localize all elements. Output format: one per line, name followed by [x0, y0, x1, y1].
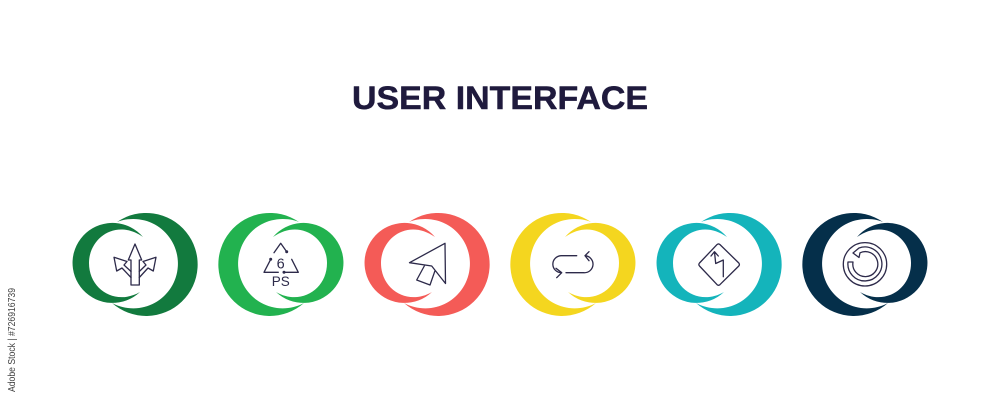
icon: winding road sign — [699, 244, 739, 285]
double crescent ring — [802, 213, 927, 316]
icon: three way arrows — [114, 244, 156, 285]
double crescent ring — [73, 213, 198, 316]
icon: cursor arrow — [410, 243, 446, 285]
double crescent ring — [657, 213, 782, 316]
item 4: yellow badge — [510, 213, 635, 316]
icon: polystyrene recycling symbol: PS — [272, 274, 290, 289]
title: USER INTERFACE — [352, 80, 648, 116]
double crescent ring — [510, 213, 635, 316]
icon: circular refresh arrow — [843, 243, 887, 286]
icon: polystyrene recycling symbol: 6 — [277, 256, 285, 272]
item 6: navy badge — [802, 213, 927, 316]
side stock label: Adobe Stock | #726916739 — [6, 288, 18, 392]
item 5: teal badge — [657, 213, 782, 316]
icon: loop arrows — [553, 252, 593, 278]
double crescent ring — [365, 213, 490, 316]
icon: polystyrene recycling symbol — [264, 243, 298, 289]
item 1: dark green badge — [73, 213, 198, 316]
double crescent ring — [218, 213, 343, 316]
item 2: green badge — [218, 213, 343, 316]
item 3: red badge — [365, 213, 490, 316]
